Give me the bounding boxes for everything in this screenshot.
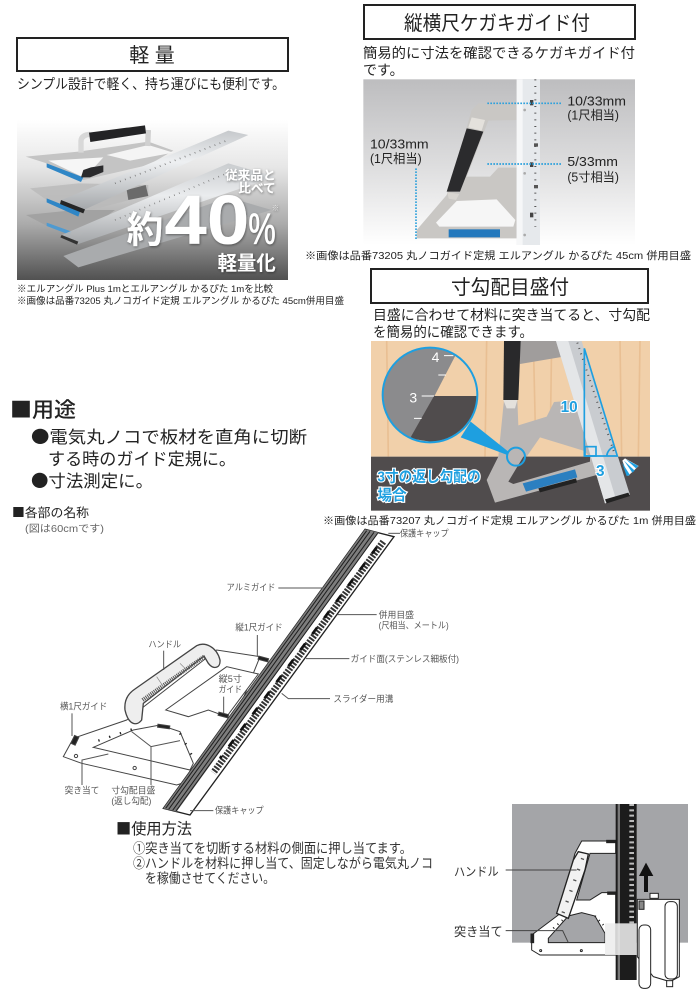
handle [557, 852, 588, 918]
callout: 約40%軽量化: ※ [272, 204, 279, 213]
circular saw [605, 893, 679, 988]
plate [63, 650, 269, 785]
callout: magnified circle: 3 [409, 390, 417, 406]
part labels: 寸勾配目盛 [111, 785, 155, 796]
part labels: (返し勾配) [111, 795, 151, 806]
label: left [370, 137, 429, 166]
icon: angle marker [622, 458, 639, 476]
part labels: 保護キャップ [400, 528, 449, 539]
part labels: 突き当て [65, 785, 99, 796]
callout: 約40%軽量化: % [248, 205, 276, 253]
panel: lightweight photo [17, 120, 288, 280]
text: usage steps: ②ハンドルを材料に押し当て、固定しながら電気丸ノコ [133, 852, 433, 872]
text: usage list: ●電気丸ノコで板材を直角に切断 [31, 423, 307, 448]
label: 3寸の返し勾配の場合: 3寸の返し勾配の [377, 469, 481, 486]
callout: 約40%軽量化: 軽量化 [218, 252, 276, 275]
text: usage steps: を稼働させてください。 [145, 871, 275, 886]
label: ハンドル [454, 865, 577, 879]
label: right middle [567, 155, 619, 184]
heading: 各部の名称 [12, 502, 104, 535]
callout: 従来品と比べて: 比べて [238, 182, 276, 196]
panel: slope photo [371, 341, 650, 511]
text: usage list [31, 423, 307, 492]
text: slope note: ※画像は品番73207 丸ノコガイド定規 エルアングル かるぴた 1m 併用目盛 [323, 514, 696, 527]
callout: 約40%軽量化: 約 [127, 210, 163, 251]
label: 突き当て [454, 925, 568, 943]
text: usage steps [133, 837, 433, 886]
product: three stacked rulers [60, 131, 275, 267]
part labels: 横1尺ガイド [60, 700, 107, 711]
text: 軽量 notes: ※画像は品番73205 丸ノコガイド定規 エルアングル かるぴた 45cm併用目盛 [17, 295, 344, 307]
square plate [531, 840, 616, 955]
text: guide note: ※画像は品番73205 丸ノコガイド定規 エルアングル かるぴた 45cm 併用目盛 [305, 249, 691, 262]
part labels: ハンドル [148, 639, 181, 649]
part labels: ガイド [219, 684, 242, 694]
product: ruler [517, 79, 540, 245]
label: right top: (1尺相当) [567, 108, 619, 122]
heading: 縦横尺ケガキガイド付 [364, 5, 635, 39]
callout: 従来品と比べて [225, 167, 276, 196]
part labels: ガイド面(ステンレス細板付) [351, 653, 459, 664]
product: square plate [417, 103, 517, 238]
aluminium rail [163, 529, 394, 815]
text: 寸勾配 description [373, 307, 650, 340]
panel: guide photo [363, 79, 635, 245]
part labels: 縦5寸 [219, 673, 242, 684]
callout: magnified circle [380, 347, 525, 466]
part labels: アルミガイド [227, 583, 275, 593]
label: right middle: (5寸相当) [567, 170, 619, 184]
annotation: gradient numbers: 3 [596, 463, 605, 480]
text: usage steps: ①突き当てを切断する材料の側面に押し当てます。 [133, 837, 412, 857]
text: 軽量 notes [17, 283, 344, 307]
label: right middle: 5/33mm [567, 155, 618, 169]
heading: 各部の名称: ■各部の名称 [12, 502, 89, 521]
product: rear plate with handle [26, 125, 173, 182]
heading: 軽量: 軽 量 [129, 44, 175, 67]
text: 寸勾配 description: 目盛に合わせて材料に突き当てると、寸勾配 [373, 307, 650, 323]
label: left: 10/33mm [370, 137, 429, 151]
text: usage list: ●寸法測定に。 [31, 467, 153, 492]
section: 使用方法 [116, 817, 433, 886]
label: ハンドル: ハンドル [454, 865, 499, 879]
part labels: 縦1尺ガイド [235, 621, 283, 632]
label: 突き当て: 突き当て [454, 925, 503, 939]
section: 用途 [10, 394, 307, 492]
annotation: gradient numbers [561, 399, 605, 480]
annotation: gradient numbers: 10 [561, 399, 578, 416]
text: ケガキガイド description: です。 [363, 62, 404, 78]
annotation: blue triangle [584, 348, 617, 456]
product: second and third plates [26, 183, 148, 237]
text: ケガキガイド description: 簡易的に寸法を確認できるケガキガイド付 [363, 45, 635, 61]
text: 軽量 notes: ※エルアングル Plus 1mとエルアングル かるぴた 1mを比較 [17, 283, 273, 295]
product: plate [487, 341, 597, 503]
heading: 各部の名称: (図は60cmです) [25, 523, 104, 535]
text: usage list: する時のガイド定規に。 [48, 450, 236, 469]
annotation: dotted guides [416, 103, 562, 239]
product: ruler [556, 341, 630, 503]
text: 寸勾配 description: を簡易的に確認できます。 [373, 324, 533, 340]
heading: 用途: ■用途 [10, 394, 76, 424]
part labels: (尺相当、メートル) [379, 619, 449, 630]
label: right top: 10/33mm [567, 94, 626, 108]
part labels [60, 528, 459, 815]
part labels: スライダー用溝 [333, 693, 393, 704]
text: ケガキガイド description [363, 45, 635, 78]
heading: 寸勾配目盛付 [371, 269, 648, 303]
handle [125, 644, 220, 724]
diagram: parts [60, 528, 459, 815]
label: left: (1尺相当) [370, 152, 422, 166]
callout: 約40%軽量化 [127, 181, 279, 275]
callout: magnified circle: 4 [432, 349, 440, 365]
part labels: 保護キャップ [215, 804, 264, 815]
callout: 従来品と比べて: 従来品と [225, 167, 276, 182]
label: 3寸の返し勾配の場合: 場合 [377, 487, 407, 504]
leader lines [72, 533, 400, 811]
label: right top [567, 94, 626, 122]
text: 軽量 description: シンプル設計で軽く、持ち運びにも便利です。 [17, 76, 285, 92]
heading: 軽量 [17, 38, 288, 71]
heading: 使用方法: ■使用方法 [116, 817, 192, 839]
heading: 寸勾配目盛付: 寸勾配目盛付 [451, 276, 569, 299]
heading: 縦横尺ケガキガイド付: 縦横尺ケガキガイド付 [404, 12, 590, 35]
ruler rail [616, 804, 637, 980]
callout: 約40%軽量化: 40 [164, 181, 249, 259]
diagram: usage illustration [454, 804, 688, 988]
label: 3寸の返し勾配の場合 [377, 469, 481, 504]
part labels: 併用目盛 [379, 609, 414, 620]
arrow: upward [639, 863, 653, 892]
